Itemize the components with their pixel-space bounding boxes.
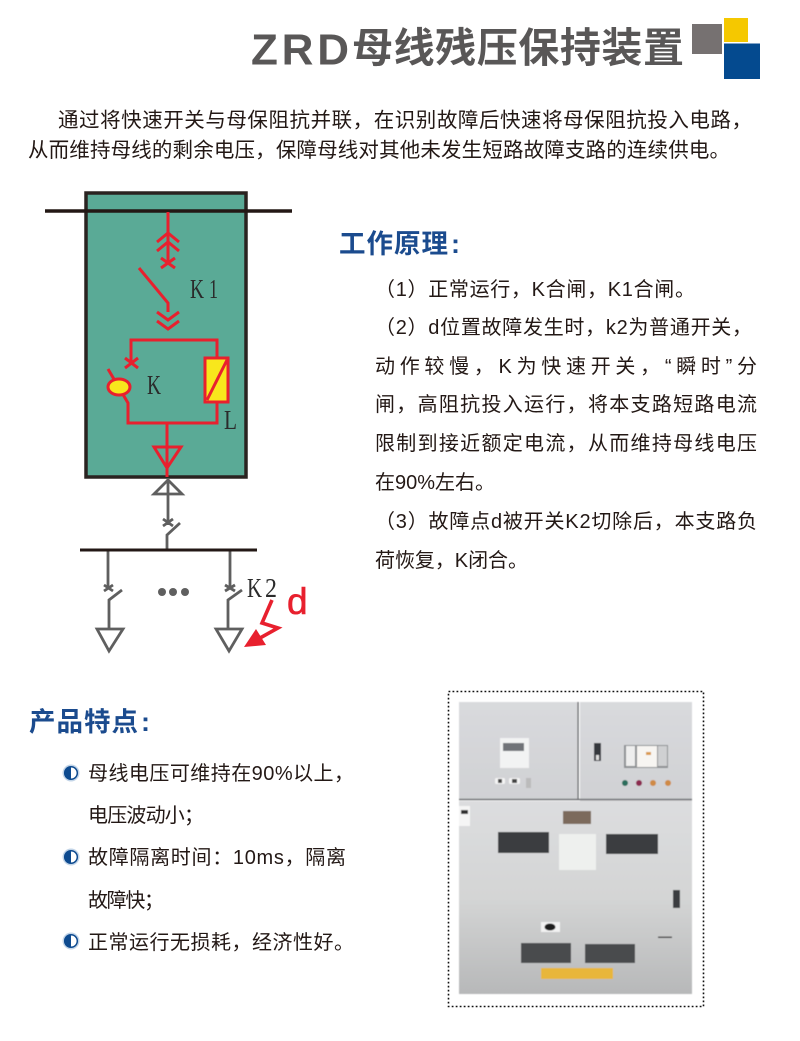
label K2: 2 [265,573,277,603]
working principle text: 闸，高阻抗投入运行，将本支路短路电流 [375,393,757,416]
intro paragraph: 从而维持母线的剩余电压，保障母线对其他未发生短路故障支路的连续供电。 [28,139,730,162]
red circuit K1 and K [108,212,228,477]
label K1: 1 [209,274,218,304]
switchgear cabinet photo [459,702,692,994]
dash slot [658,936,672,938]
lower black windows [521,943,635,963]
feature 2: 故障隔离时间：10ms，隔离 [88,846,346,869]
key lock [541,922,560,932]
working principle text: （2）d位置故障发生时，k2为普通开关， [375,316,752,339]
upper black windows [498,832,658,854]
door handle [594,743,601,761]
feature 3: 正常运行无损耗，经济性好。 [88,931,354,954]
bullet icon 1 [62,764,80,782]
label K: K [147,370,161,400]
intro paragraph: 通过将快速开关与母保阻抗并联，在识别故障后快速将母保阻抗投入电路， [58,109,752,132]
label K1 [190,274,218,304]
label K2: K [247,573,262,603]
product features heading: 产品特点 [29,707,138,737]
lower busbar [80,548,257,552]
label L: L [224,405,237,435]
title: 母线残压保持装置 [352,25,684,71]
working principle heading: : [451,229,460,259]
lower grey circuit [97,478,242,651]
ellipsis dots [158,588,189,596]
lower door [459,801,692,994]
white notice [559,834,596,870]
fault label d: d [287,581,308,622]
indicator lamps [622,780,671,786]
working principle text: （3）故障点d被开关K2切除后，本支路负 [375,510,757,533]
dotted photo frame [448,692,704,1006]
door seams [459,702,692,800]
feature 1: 母线电压可维持在90%以上， [88,762,354,785]
fault arrow [244,600,278,647]
feature 1 [88,762,354,827]
feature 2: 故障快； [88,889,164,912]
protection device [624,745,668,768]
bullet icon 3 [62,932,80,950]
title: ZRD [251,26,349,74]
yellow warning label [541,968,613,979]
intro paragraph [28,109,752,162]
upper right door [580,702,692,801]
lower handle [673,890,680,908]
upper left door [459,702,577,800]
working principle text: 在90%左右。 [375,471,495,494]
logo squares [692,18,760,79]
push buttons [495,778,531,788]
working principle heading: 工作原理 [339,229,448,259]
working principle text [375,278,757,572]
label K1: K [190,274,204,304]
bullet icon 2 [62,848,80,866]
controller display [500,738,529,768]
feature 1: 电压波动小； [88,804,204,827]
working principle text: 动作较慢，K为快速开关，“瞬时”分 [375,355,757,378]
working principle text: 限制到接近额定电流，从而维持母线电压 [375,432,757,455]
working principle text: （1）正常运行，K合闸，K1合闸。 [375,278,695,301]
incoming busbar [45,209,292,213]
label K2 [247,573,277,603]
cabinet box [86,193,246,477]
product features heading: : [141,707,150,737]
circuit diagram [45,193,308,651]
nameplate [563,811,591,824]
side label [459,806,470,826]
product features list [62,762,354,954]
feature 2 [88,846,346,912]
working principle text: 荷恢复，K闭合。 [375,549,528,572]
